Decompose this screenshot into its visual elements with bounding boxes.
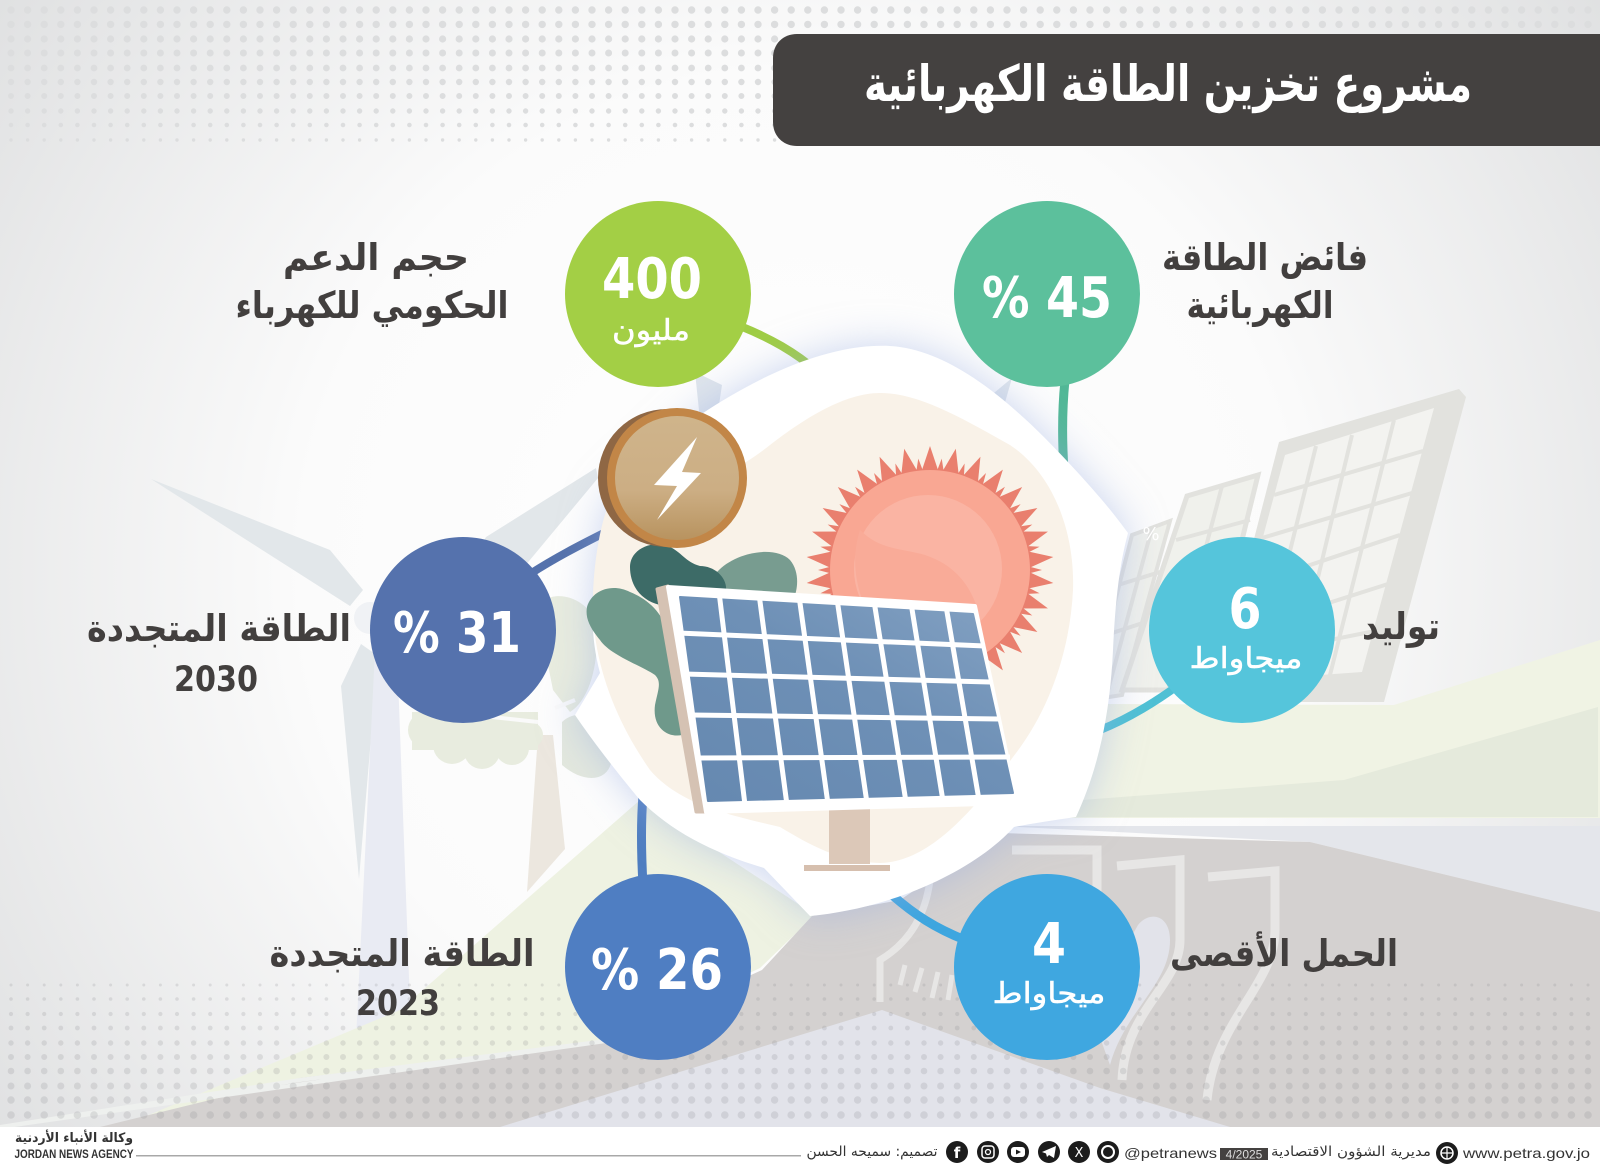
item: renewable energy 2023: الطاقة المتجددة bbox=[270, 932, 534, 975]
footer bbox=[0, 1127, 1600, 1172]
designer credit: تصميم: سميحه الحسن bbox=[806, 1144, 938, 1160]
white centre blob bbox=[575, 346, 1128, 916]
item: renewable energy 2030: % 31 bbox=[393, 601, 521, 666]
item: renewable energy 2030: الطاقة المتجددة bbox=[87, 607, 351, 650]
panel frame bbox=[657, 586, 708, 812]
item: renewable energy 2030: 2030 bbox=[174, 660, 258, 700]
item: electricity surplus bbox=[954, 201, 1368, 387]
background: tree bbox=[408, 596, 612, 892]
beige blob bbox=[593, 393, 1073, 863]
item: renewable energy 2023: % 26 bbox=[591, 938, 723, 1003]
connector lines bbox=[530, 326, 1180, 940]
panel stand bbox=[804, 806, 890, 871]
icon: energy coin bbox=[598, 408, 747, 548]
icon: leaves bbox=[587, 544, 797, 736]
icon: globe bbox=[1436, 1142, 1458, 1164]
item: electricity surplus: فائض الطاقة bbox=[1162, 236, 1368, 279]
background: dam bbox=[880, 850, 1275, 1100]
item: renewable energy 2023 bbox=[270, 874, 751, 1060]
item: generation bbox=[1149, 537, 1440, 723]
item: government support bbox=[236, 201, 751, 387]
background: solar panels bbox=[1090, 389, 1466, 702]
date badge: 4/2025 bbox=[1226, 1148, 1263, 1162]
agency logo bbox=[14, 1129, 134, 1161]
item: government support: مليون bbox=[612, 313, 690, 347]
item: renewable energy 2030 bbox=[87, 537, 556, 723]
agency logo: JORDAN NEWS AGENCY bbox=[14, 1147, 134, 1161]
item: peak load bbox=[954, 874, 1398, 1060]
item: generation: ميجاواط bbox=[1190, 641, 1302, 675]
item: electricity surplus: % 45 bbox=[982, 266, 1112, 331]
icon: sun bbox=[806, 446, 1054, 693]
department name: مديرية الشؤون الاقتصادية bbox=[1271, 1144, 1431, 1160]
background: left green hill and grey ridge bbox=[0, 800, 1600, 1127]
item: peak load: ميجاواط bbox=[992, 976, 1106, 1010]
agency logo: وكالة الأنباء الأردنية bbox=[15, 1129, 133, 1146]
social icons: f bbox=[954, 1144, 961, 1162]
item: renewable energy 2023: 2023 bbox=[356, 984, 440, 1024]
item: government support: حجم الدعم bbox=[283, 236, 469, 279]
background: bottom dot pattern bbox=[11, 985, 1600, 1115]
solar panel bbox=[657, 586, 1017, 871]
social icons bbox=[946, 1141, 1119, 1163]
website: www.petra.gov.jo bbox=[1462, 1145, 1590, 1161]
social icons: X bbox=[1075, 1146, 1084, 1161]
item: government support: الحكومي للكهرباء bbox=[236, 284, 508, 327]
title banner bbox=[773, 34, 1600, 146]
item: peak load: الحمل الأقصى bbox=[1170, 930, 1398, 975]
item: generation: توليد bbox=[1362, 605, 1440, 648]
item: generation: 6 bbox=[1228, 577, 1262, 642]
item: electricity surplus: الكهربائية bbox=[1186, 284, 1334, 327]
item: peak load: 4 bbox=[1032, 912, 1066, 977]
faint percent mark: % bbox=[1142, 524, 1160, 545]
panel cells bbox=[680, 597, 1013, 801]
item: government support: 400 bbox=[602, 247, 702, 312]
background: wind turbine bbox=[151, 372, 1012, 1060]
background: green hills right bbox=[1040, 640, 1600, 818]
social handle: @petranews bbox=[1124, 1145, 1217, 1161]
